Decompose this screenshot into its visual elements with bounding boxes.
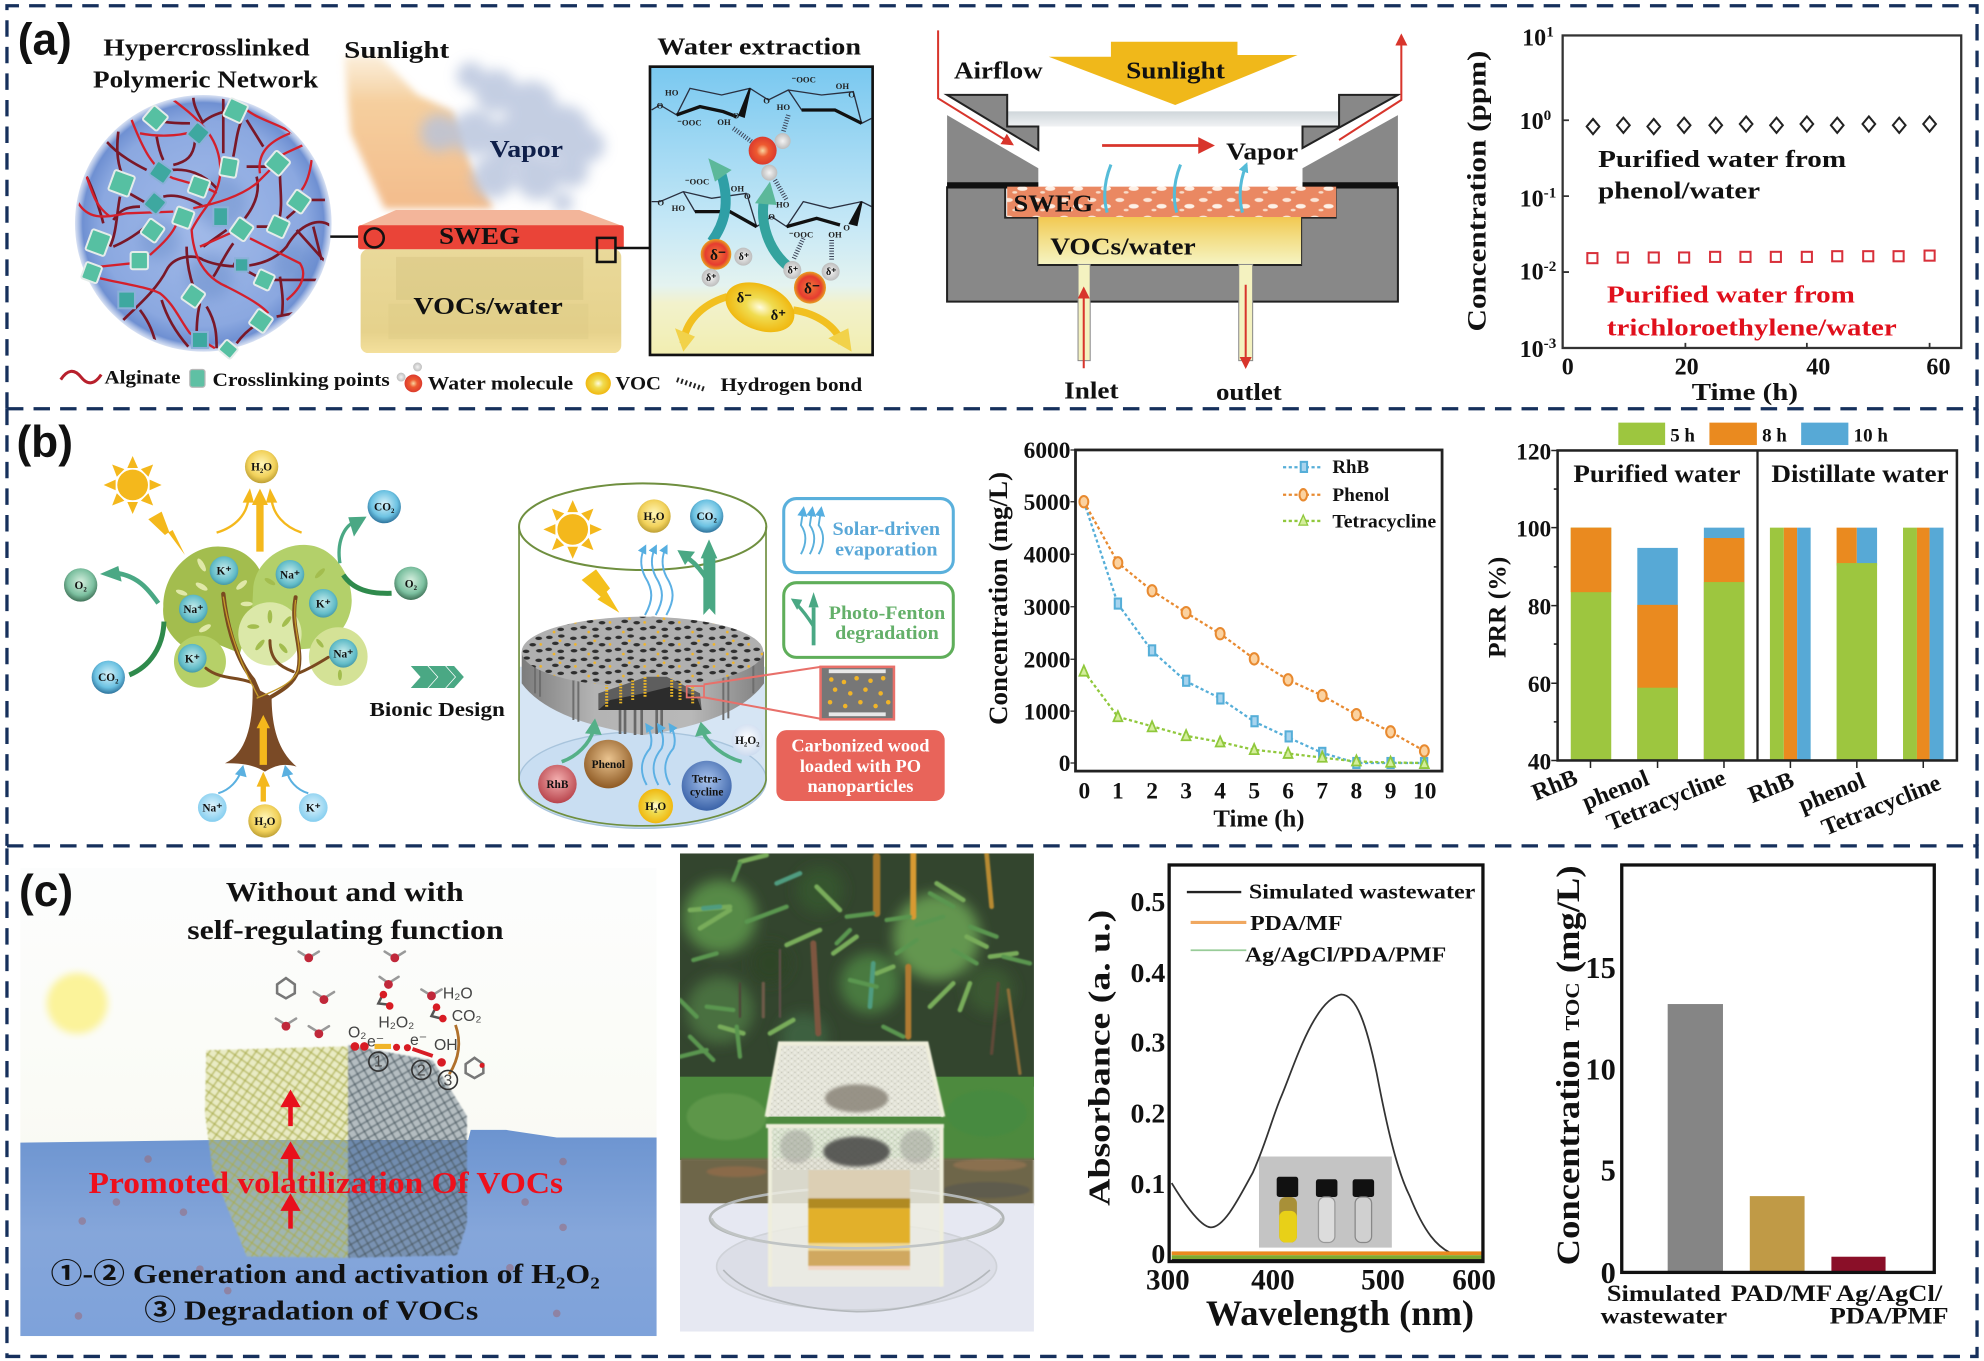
chart: concentration vs time (a): 1 [1546,24,1554,41]
reaction labels: H₂O [443,985,473,1002]
chart: TOC concentration bars (c): Concentration TOC (mg/L) [1551,865,1587,1265]
legend row (a): VOC [615,374,661,395]
chart: concentration vs time (b): 2 [1146,778,1158,804]
spheres (cylinder): H₂O [645,801,666,813]
chart: concentration vs time (a): 60 [1926,355,1950,381]
water extraction molecular panel [650,67,873,355]
arrow: bionic design chevrons [410,666,464,688]
panel: (c) frame [7,846,1977,1356]
cylinder reactor (b) [519,483,766,828]
callout: carbonized wood [776,730,945,801]
chart: concentration vs time (b): 4 [1214,778,1226,804]
legend row (a) [61,363,863,396]
chart: concentration vs time (a): 10 [1520,337,1544,363]
callout: carbonized wood: loaded with PO [800,756,921,776]
device labels: Inlet [1064,379,1119,405]
spheres (cylinder): cycline [690,786,723,798]
legend row (a): Crosslinking points [213,370,390,391]
chart: concentration vs time (a): 10 [1520,186,1544,212]
chart: absorbance spectra (c): 300 [1146,1264,1190,1296]
ion and gas spheres (tree): Na⁺ [202,803,222,815]
spheres (cylinder): H₂O [644,511,665,523]
chart: concentration vs time (b): 1000 [1024,699,1070,725]
water extraction molecular panel: ⁻OOC [792,75,816,85]
chart: PRR stacked bars (b): 40 [1528,749,1551,775]
legend box: photo-Fenton degradation: degradation [835,623,939,644]
chart: concentration vs time (a): -2 [1544,258,1556,275]
chart: TOC concentration bars (c): PDA/PMF [1830,1304,1949,1330]
water extraction molecular panel: δ⁺ [788,265,798,276]
chart: concentration vs time (a): 0 [1562,355,1574,381]
chart: PRR stacked bars (b): 120 [1516,439,1551,465]
chart: concentration vs time (b): Tetracycline [1332,512,1436,533]
device labels: Airflow [954,58,1043,84]
chart: concentration vs time (b): 2000 [1024,647,1070,673]
label: VOCs/water: VOCs/water [413,294,563,320]
chart: absorbance spectra (c): 0 [1151,1239,1165,1270]
water extraction molecular panel: ⁻OOC [685,176,709,186]
water extraction molecular panel: ⁻OOC [789,229,813,239]
chart: TOC concentration bars (c): Ag/AgCl/ [1836,1281,1943,1307]
chart: concentration vs time (a): 20 [1675,355,1699,381]
ion and gas spheres (tree): K⁺ [306,803,321,815]
chart: absorbance spectra (c): 600 [1452,1264,1496,1296]
water extraction molecular panel: δ⁻ [804,280,820,297]
legend box: solar-driven evaporation [784,499,953,573]
water extraction molecular panel: O [657,197,664,207]
chart: absorbance spectra (c): 0.3 [1131,1027,1165,1058]
chart: PRR stacked bars (b): RhB [1528,765,1582,806]
chart: PRR stacked bars (b): 100 [1516,517,1551,543]
chart: PRR stacked bars (b): Tetracycline [1818,770,1945,841]
chart: concentration vs time (b): 5000 [1024,490,1070,516]
label: generation and activation: ①-② Generation and activation of H₂O₂ [51,1259,600,1290]
water extraction molecular panel: δ⁺ [826,267,836,278]
chart: concentration vs time (b): 10 [1413,778,1436,804]
label: promoted volatilization: Promoted volatilization Of VOCs [89,1166,563,1200]
heading: Hypercrosslinked Polymeric Network [93,36,319,93]
photo: evaporator in bamboo setting [680,853,1034,1332]
ion and gas spheres (tree) [64,450,428,838]
ion and gas spheres (tree): CO₂ [98,672,119,684]
reaction labels: 1 [374,1054,383,1071]
device labels: outlet [1216,380,1282,406]
ion and gas spheres (tree): Na⁺ [280,569,300,581]
device labels: Sunlight [1126,58,1225,84]
chart: absorbance spectra (c): 500 [1361,1264,1405,1296]
device labels [954,58,1299,406]
label (b): (b) [16,418,73,467]
chart: TOC concentration bars (c): 10 [1585,1052,1616,1086]
ion and gas spheres (tree): H₂O [254,816,276,828]
water extraction molecular panel: HO [776,200,790,210]
panel: (b) frame [7,409,1977,846]
water extraction molecular panel: O [768,211,775,221]
evaporator illustration: sunlight, vapor, SWEG and water block [344,56,650,353]
water extraction molecular panel: OH [836,81,849,91]
reaction labels: H₂O₂ [378,1014,414,1031]
chart: concentration vs time (b): 3000 [1024,595,1070,621]
chart: PRR stacked bars (b): phenol [1795,768,1869,818]
heading: Without and with self-regulating function: Without and with [226,877,464,908]
chart: concentration vs time (a): Purified water from [1598,147,1846,173]
water extraction molecular panel: δ⁺ [706,273,716,284]
reaction labels: e⁻ [410,1032,427,1049]
ion and gas spheres (tree): Na⁺ [333,648,353,660]
spheres (cylinder): RhB [546,779,569,791]
label: degradation: ③ Degradation of VOCs [144,1296,478,1327]
scene: self-regulating evaporator (c) [20,950,657,1336]
chart: absorbance spectra (c): 0.1 [1131,1169,1165,1200]
legend box: photo-Fenton degradation: Photo-Fenton [829,603,946,624]
chart: TOC concentration bars (c): PAD/MF [1731,1281,1832,1307]
chart: absorbance spectra (c): Ag/AgCl/PDA/PMF [1245,943,1446,967]
legend row (a): Alginate [105,367,180,388]
chart: absorbance spectra (c): Wavelength (nm) [1206,1293,1474,1333]
chart: concentration vs time (b): 6000 [1024,438,1070,464]
chart: concentration vs time (b): RhB [1332,457,1369,478]
chart: absorbance spectra (c) [1083,865,1496,1333]
tree illustration (b) [100,488,392,802]
chart: concentration vs time (a): -3 [1544,335,1557,352]
reaction labels: O₂ [348,1025,366,1042]
chart: TOC concentration bars (c): 5 [1601,1154,1616,1188]
label: Sunlight (a): Sunlight [344,38,449,64]
chart: PRR stacked bars (b): phenol [1579,765,1653,816]
chart: PRR stacked bars (b): 8 h [1762,426,1787,447]
device labels: VOCs/water [1050,234,1196,260]
callout: carbonized wood: nanoparticles [807,776,913,796]
water extraction molecular panel: OH [717,117,731,127]
chart: PRR stacked bars (b): RhB [1745,767,1798,809]
chart: concentration vs time (a): Concentration (ppm) [1461,51,1491,332]
label: Bionic Design: Bionic Design [369,699,505,721]
ion and gas spheres (tree): K⁺ [217,566,231,578]
chart: PRR stacked bars (b): 5 h [1670,426,1695,447]
chart: concentration vs time (a): 0 [1544,107,1552,124]
ion and gas spheres (tree): K⁺ [316,598,331,610]
inset: PO nanoparticles zoom [687,667,894,719]
water extraction molecular panel: HO [672,203,685,213]
device labels: SWEG [1014,191,1094,217]
chart: PRR stacked bars (b): PRR (%) [1484,557,1512,658]
spheres (cylinder): Tetra- [692,774,722,786]
water extraction molecular panel: O [763,95,770,105]
chart: absorbance spectra (c): Absorbance (a. u.) [1083,910,1117,1206]
chart: absorbance spectra (c): Simulated wastewater [1249,879,1476,903]
chart: concentration vs time (b): 5 [1248,778,1260,804]
chart: concentration vs time (b): Concentration (mg/L) [983,472,1013,725]
chart: absorbance spectra (c): 400 [1251,1264,1295,1296]
reaction labels: e⁻ [367,1033,384,1050]
chart: PRR stacked bars (b): 60 [1528,672,1551,698]
water extraction molecular panel: O [843,223,850,233]
heading: Hypercrosslinked Polymeric Network: Polymeric Network [93,67,319,93]
water extraction molecular panel: OH [731,183,744,193]
panel: (a) frame [7,6,1977,409]
water extraction molecular panel: O [657,101,664,111]
chart: concentration vs time (b): 9 [1385,778,1396,804]
heading: Water extraction: Water extraction [657,34,861,60]
chart: TOC concentration bars (c) [1551,865,1949,1330]
chart: concentration vs time (b): 0 [1059,751,1070,777]
chart: PRR stacked bars (b): 80 [1528,594,1551,620]
label: SWEG: SWEG [439,224,520,250]
water extraction molecular panel: δ⁺ [739,252,749,263]
chart: concentration vs time (b): 3 [1180,778,1192,804]
chart: concentration vs time (a): trichloroethylene/water [1607,315,1897,341]
water extraction molecular panel: HO [777,102,790,112]
chart: PRR stacked bars (b): Purified water [1573,460,1740,488]
label (a): (a) [18,15,72,64]
chart: concentration vs time (a): 10 [1522,26,1546,52]
water extraction molecular panel: ⁻OOC [677,117,702,127]
ion and gas spheres (tree): CO₂ [374,502,395,514]
legend box: photo-Fenton degradation [784,583,953,657]
heading: Without and with self-regulating function: self-regulating function [187,915,504,946]
callout: carbonized wood: Carbonized wood [791,736,929,756]
label: Vapor: Vapor [490,137,563,163]
legend row (a): Hydrogen bond [720,375,863,396]
heading: Without and with self-regulating function [187,877,504,946]
reaction labels: 2 [417,1063,426,1080]
chart: concentration vs time (a) [1461,24,1961,406]
reaction labels: OH [434,1037,458,1054]
reaction labels: CO₂ [452,1008,482,1025]
chart: TOC concentration bars (c): 0 [1601,1256,1616,1290]
legend box: solar-driven evaporation: evaporation [835,539,938,560]
ion and gas spheres (tree): O₂ [75,580,87,592]
label (c): (c) [19,867,73,916]
water extraction molecular panel: δ⁺ [771,308,786,324]
reaction labels [348,985,482,1090]
chart: concentration vs time (b): Phenol [1332,485,1389,506]
spheres (cylinder): CO₂ [696,511,717,523]
chart: concentration vs time (a): 10 [1520,109,1544,135]
water extraction molecular panel: δ⁻ [737,291,752,307]
chart: concentration vs time (b) [983,438,1442,832]
chart: TOC concentration bars (c): Simulated [1607,1281,1721,1307]
chart: absorbance spectra (c): PDA/MF [1250,911,1342,935]
water extraction molecular panel: δ⁻ [710,247,726,264]
chart: absorbance spectra (c): 0.4 [1131,958,1165,989]
chart: concentration vs time (a): Purified water from [1607,282,1855,308]
chart: absorbance spectra (c): 0.5 [1131,887,1165,918]
ion and gas spheres (tree): O₂ [405,578,418,590]
water extraction molecular panel: HO [665,88,679,98]
chart: concentration vs time (b): 6 [1282,778,1294,804]
ion and gas spheres (tree): H₂O [251,462,272,474]
chart: concentration vs time (a): phenol/water [1598,179,1760,205]
water extraction molecular panel: O [848,90,855,100]
polymer network sphere [75,95,332,359]
chart: concentration vs time (a): 40 [1806,355,1830,381]
chart: concentration vs time (b): Time (h) [1213,806,1305,832]
chart: concentration vs time (b): 8 [1351,778,1362,804]
reaction labels: 3 [443,1073,452,1090]
vapor molecules [276,952,485,1078]
spheres (cylinder): Phenol [592,759,625,771]
chart: concentration vs time (b): 4000 [1024,542,1070,568]
chart: absorbance spectra (c): 0.2 [1131,1098,1165,1129]
spheres (cylinder): H₂O₂ [735,735,760,747]
chart: PRR stacked bars (b): Tetracycline [1603,765,1730,836]
ion and gas spheres (tree): Na⁺ [183,604,203,616]
spheres (cylinder) [538,499,763,823]
icon: sun (tree) [104,456,162,514]
chart: concentration vs time (b): 1 [1112,778,1124,804]
chart: PRR stacked bars (b): Distillate water [1771,460,1949,488]
chart: concentration vs time (b): 7 [1316,778,1328,804]
legend box: solar-driven evaporation: Solar-driven [833,519,941,540]
chart: TOC concentration bars (c): 15 [1585,951,1616,985]
chart: TOC concentration bars (c): wastewater [1601,1304,1727,1330]
chart: concentration vs time (a): 10 [1520,260,1544,286]
legend row (a): Water molecule [428,374,573,395]
chart: concentration vs time (b): 0 [1079,778,1090,804]
device labels: Vapor [1226,139,1299,165]
water extraction molecular panel: O [733,110,740,120]
water extraction molecular panel: OH [828,229,842,239]
device schematic (a) [938,30,1401,368]
chart: concentration vs time (a): Time (h) [1692,380,1798,406]
ion and gas spheres (tree): K⁺ [185,653,200,665]
chart: concentration vs time (a): -1 [1544,184,1556,201]
chart: PRR stacked bars (b) [1484,423,1957,841]
water extraction molecular panel: O [744,191,751,201]
chart: PRR stacked bars (b): 10 h [1854,426,1888,447]
callout line to network [330,236,364,238]
icon: sun (cylinder) [543,500,602,559]
heading: Hypercrosslinked Polymeric Network: Hypercrosslinked [103,36,310,62]
